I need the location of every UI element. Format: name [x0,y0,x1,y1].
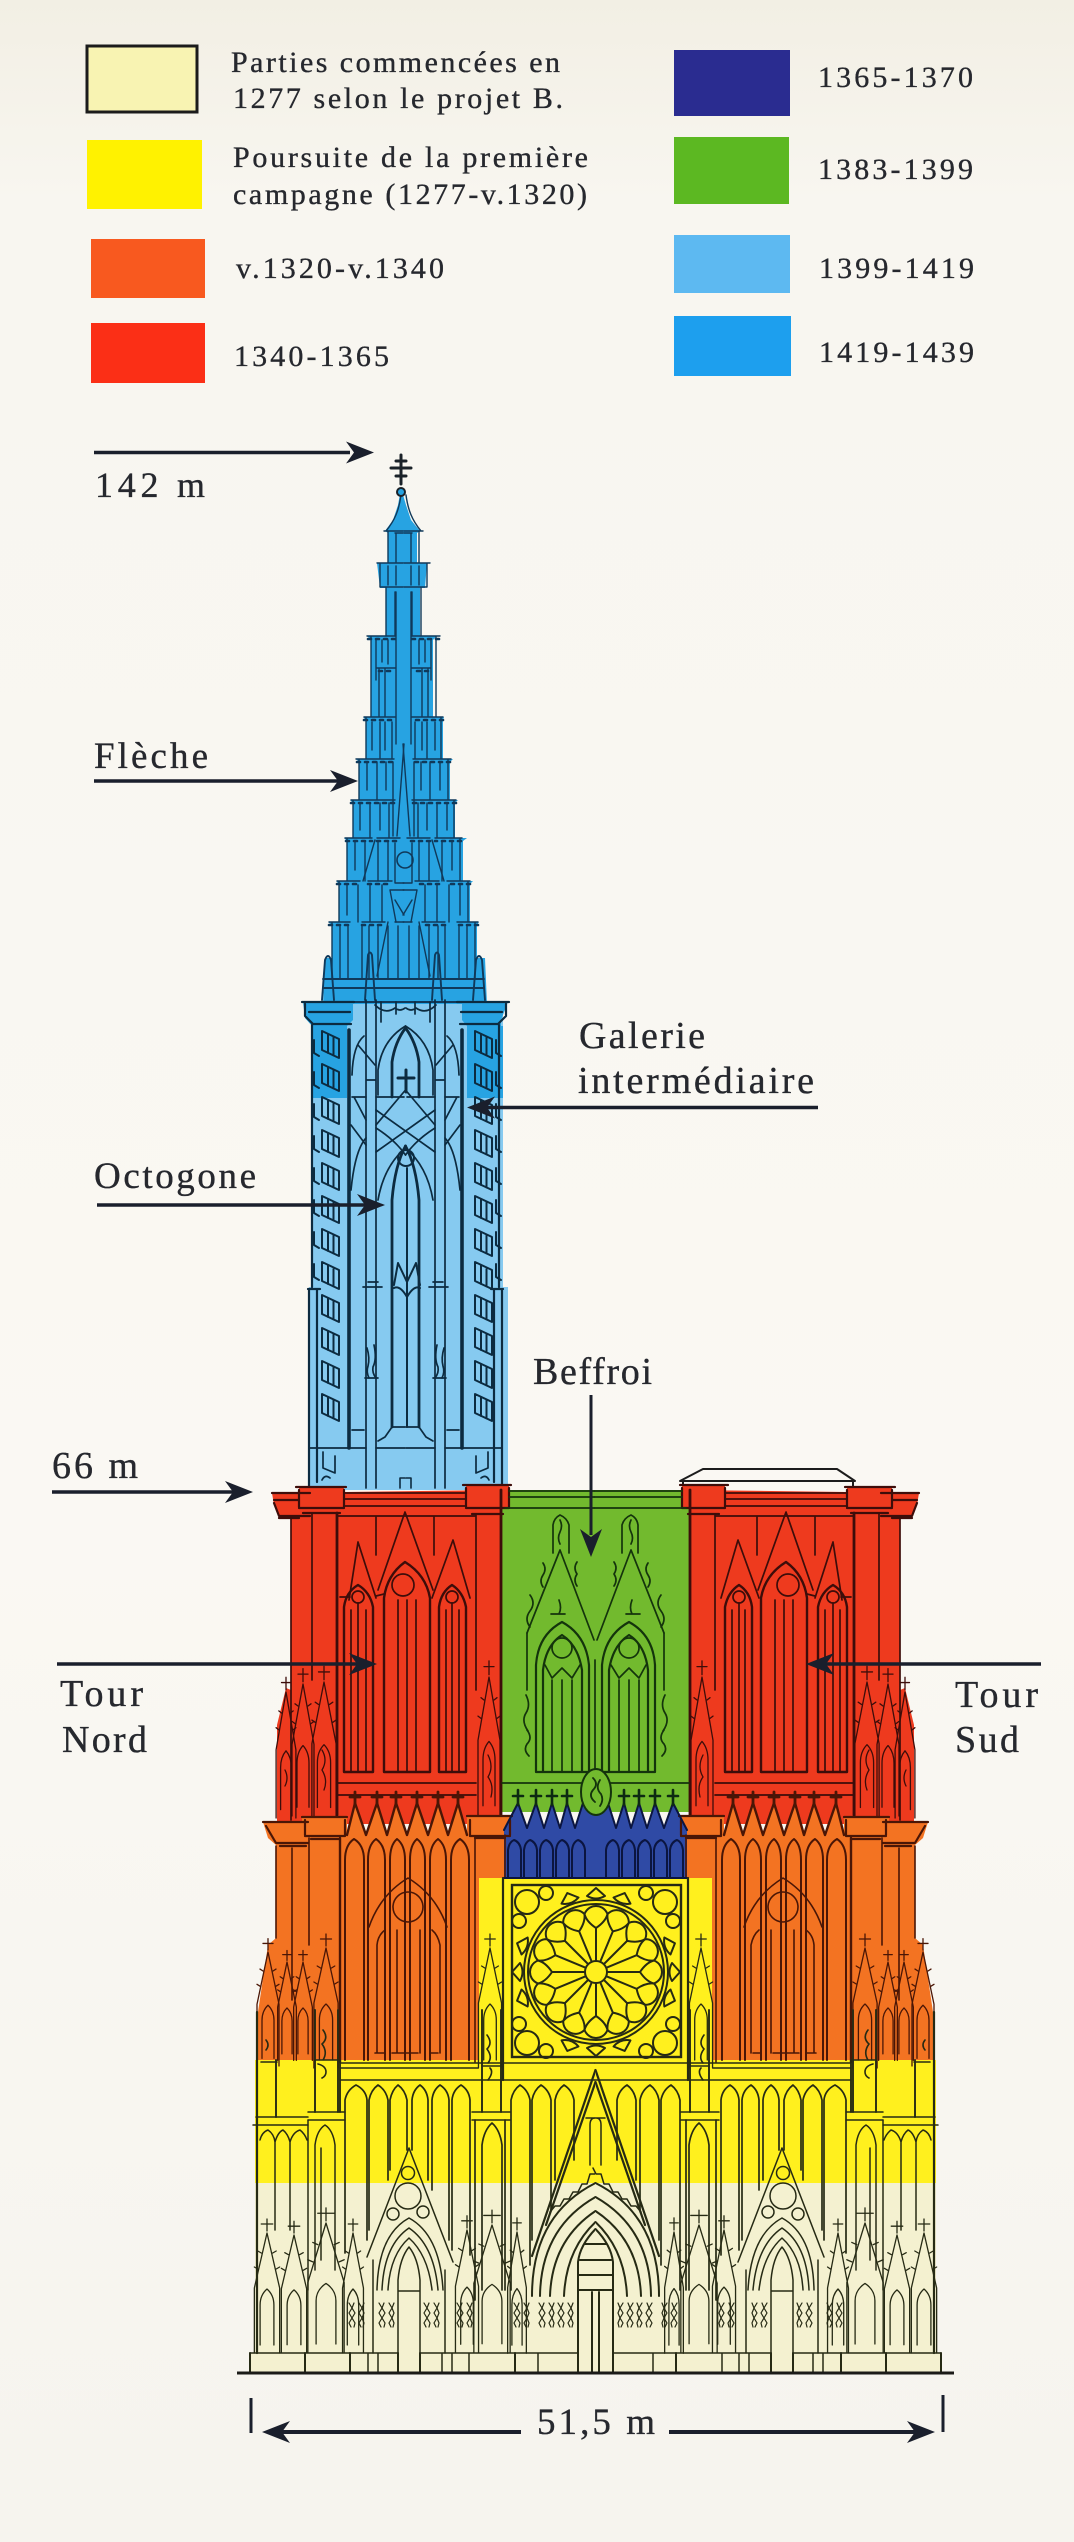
panel: legend [87,46,974,383]
arrow and label: Tour Sud [806,1653,1041,1761]
arrow and label: Octogone [94,1156,385,1216]
arrow and label: Galerie intermédiaire: intermédiaire [578,1060,814,1102]
north half of the facade [250,1485,598,2372]
arrow and label: Galerie intermédiaire: Galerie [579,1015,705,1057]
arrow and label: Galerie intermédiaire [467,1015,818,1118]
arrow and label: Octogone: Octogone [94,1156,256,1197]
legend item: 1340-1365 [91,323,389,383]
arrow and label: Tour Nord [57,1653,377,1761]
octagon tower [302,1000,509,1490]
arrow and label: Tour Sud: Tour [955,1674,1038,1716]
arrow and label: 142 m: 142 m [95,465,205,505]
navy gallery line work north half [504,1790,596,1878]
annotations [52,442,1041,2443]
rose window [512,1885,681,2058]
colour zones north [250,1485,596,2372]
legend item: 1383-1399: 1383-1399 [818,153,973,186]
legend item: 1399-1419 [674,235,974,293]
legend item: poursuite de la première campagne [87,140,588,211]
belfry oval medallion [581,1769,611,1815]
belfry line work north half [502,1491,596,1783]
legend item: poursuite de la première campagne: Poursuite de la première [233,141,588,174]
legend item: 1383-1399 [674,137,973,204]
octagon centre details [394,1070,420,1427]
arrow and label: Tour Nord: Tour [60,1673,143,1715]
arrow and label: Beffroi [533,1351,652,1557]
legend item: 1365-1370 [674,50,973,116]
arrow and label: 142 m [94,442,374,505]
spire finial cross [391,455,413,868]
spire fill [323,488,487,1004]
arrow and label: Beffroi: Beffroi [533,1351,652,1393]
terrace on south tower [680,1469,855,1492]
legend item: 1419-1439: 1419-1439 [819,336,974,369]
spire ornament: half left [322,495,404,1002]
width dimension: 51,5 m: 51,5 m [537,2402,655,2443]
arrow and label: Flèche [94,736,358,792]
south half of the facade [593,1485,941,2372]
base line [237,2372,954,2374]
octagon line work: half left [302,1000,435,1488]
legend item: 1340-1365: 1340-1365 [234,340,389,373]
legend item: 1419-1439 [674,316,974,376]
north tower red level line work [272,1485,511,1820]
lower facade line work north half [250,1878,598,2372]
legend item: parties commencées en 1277: Parties commencées en [231,46,560,79]
arrow and label: Tour Sud: Sud [955,1719,1019,1761]
octagon buttress upper colour [303,1002,508,1098]
octagon buttress windows [314,1031,501,1421]
octagon fill [309,1004,508,1490]
legend item: v.1320-v.1340 [91,239,444,298]
octagon line work: half right [376,1000,509,1488]
legend item: 1365-1370: 1365-1370 [818,61,973,94]
legend item: parties commencées en 1277: 1277 selon le projet B. [233,82,563,115]
north tower orange level line work [257,1792,512,2068]
arrow and label: Tour Nord: Nord [62,1719,147,1761]
width dimension: 51,5 m [251,2395,943,2443]
spire ornament: half right [403,495,485,1002]
legend item: poursuite de la première campagne: campagne (1277-v.1320) [233,178,587,211]
legend item: v.1320-v.1340: v.1320-v.1340 [236,252,444,285]
legend item: parties commencées en 1277 [87,46,563,115]
arrow and label: 66 m [52,1445,253,1503]
cathedral elevation [237,455,954,2373]
spire: flèche [322,455,487,1004]
arrow and label: 66 m: 66 m [52,1445,138,1487]
legend item: 1399-1419: 1399-1419 [819,252,974,285]
arrow and label: Flèche: Flèche [94,736,208,777]
